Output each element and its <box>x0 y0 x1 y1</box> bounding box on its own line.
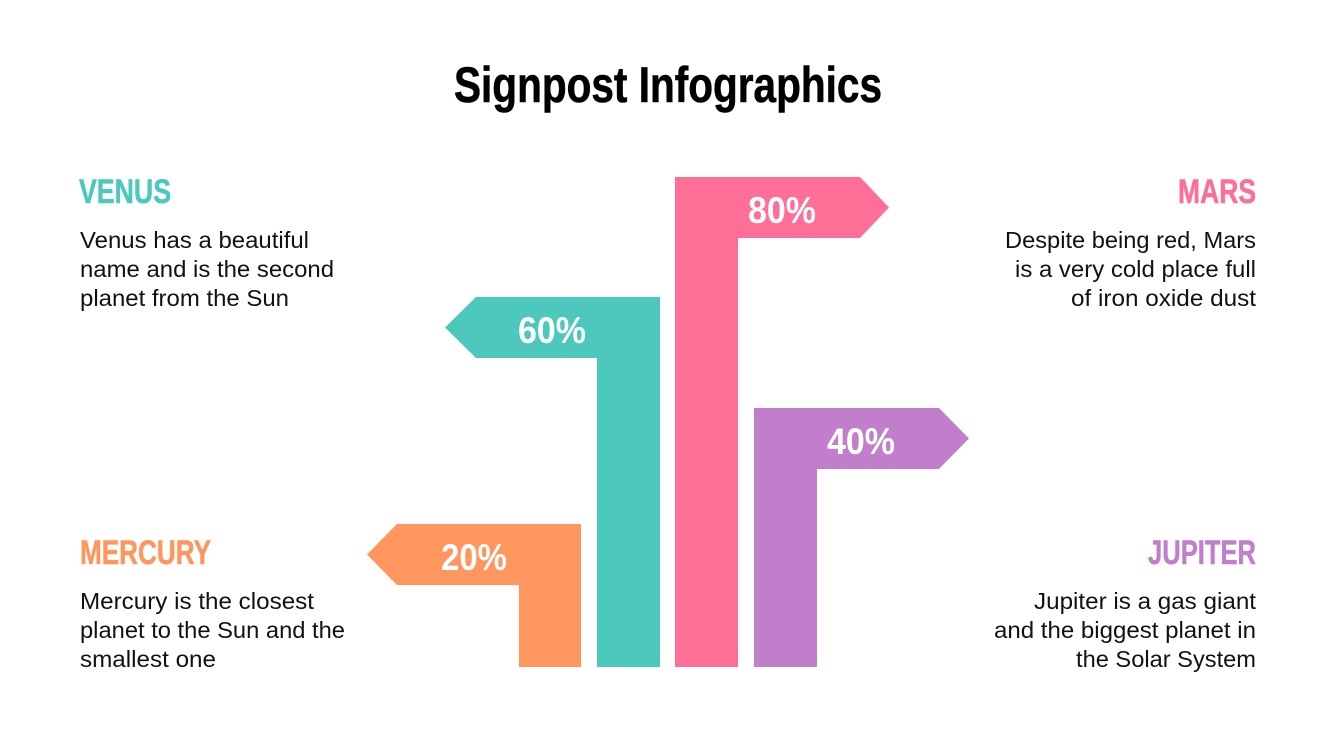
signpost: mercury 20% <box>367 524 581 667</box>
text block: mars: Despite being red, Mars <box>1005 227 1256 253</box>
text block: mercury: Mercury is the closest <box>80 588 315 614</box>
text block: mercury: MERCURY <box>80 534 211 572</box>
text block: mercury: planet to the Sun and the <box>80 617 345 643</box>
title: Signpost Infographics <box>454 57 882 113</box>
text block: jupiter <box>994 534 1257 672</box>
text block: venus: Venus has a beautiful <box>80 227 309 253</box>
signpost: jupiter 40%: 40% <box>827 421 895 462</box>
text block: mercury: smallest one <box>80 646 216 672</box>
signpost: jupiter 40% <box>754 408 969 667</box>
text block: venus: name and is the second <box>80 256 334 282</box>
text block: jupiter: Jupiter is a gas giant <box>1034 588 1257 614</box>
signpost: mercury 20%: 20% <box>441 537 507 578</box>
signpost: mars 80% <box>675 177 889 667</box>
text block: jupiter: and the biggest planet in <box>994 617 1256 643</box>
text block: venus <box>79 173 334 311</box>
signpost: venus 60% <box>445 297 660 667</box>
text block: mars: of iron oxide dust <box>1071 285 1257 311</box>
text block: mercury <box>80 534 345 672</box>
text block: jupiter: the Solar System <box>1076 646 1256 672</box>
text block: jupiter: JUPITER <box>1148 534 1256 572</box>
signpost: mars 80%: 80% <box>748 190 816 231</box>
text block: mars: is a very cold place full <box>1015 256 1256 282</box>
text block: venus: planet from the Sun <box>80 285 289 311</box>
text block: mars: MARS <box>1178 173 1256 211</box>
text block: mars <box>1005 173 1257 311</box>
signpost: venus 60%: 60% <box>518 310 586 351</box>
text block: venus: VENUS <box>79 173 171 211</box>
